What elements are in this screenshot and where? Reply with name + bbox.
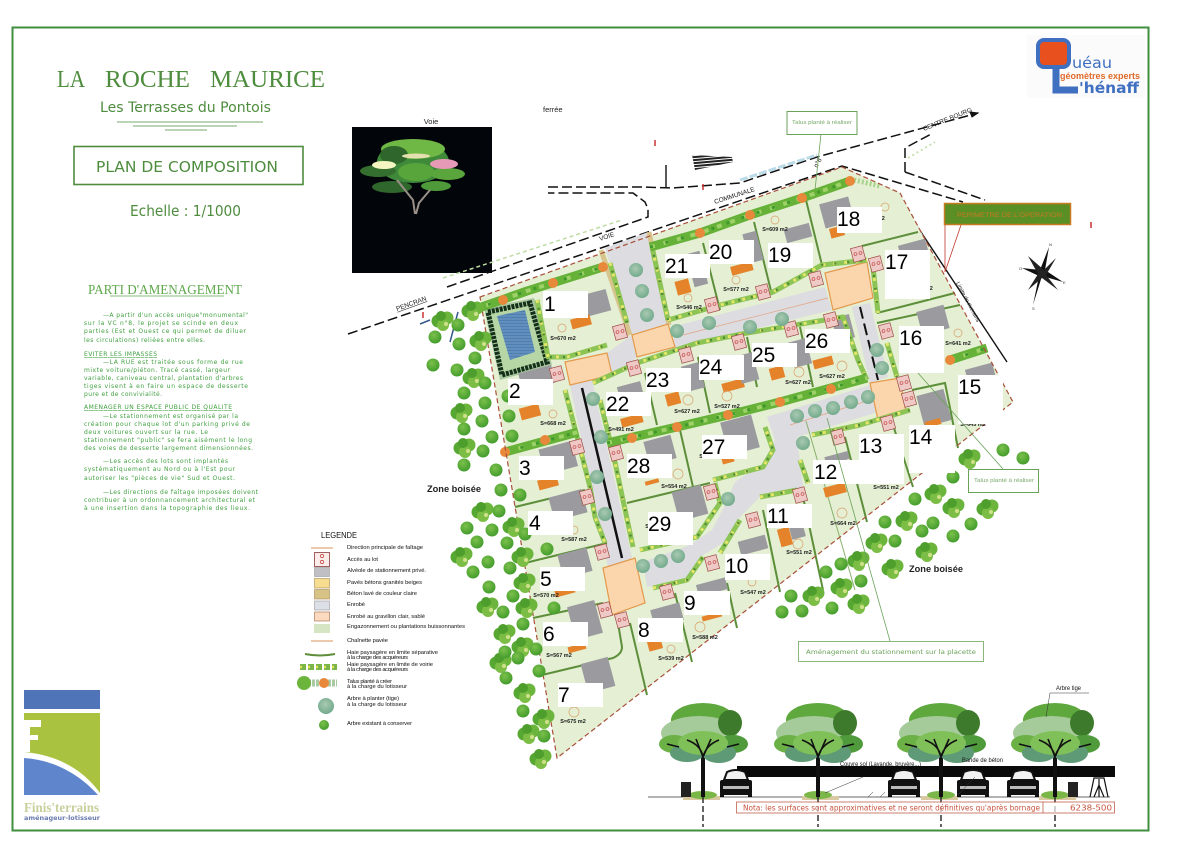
logo: Finis'terrains (24, 690, 101, 822)
lot number labels: 6 (543, 623, 555, 646)
section labels: Couvre sol (Lavande, bruyère...) (840, 762, 921, 768)
woodland trees (426, 301, 1030, 769)
logo: Finis'terrains: Finis'terrains (24, 801, 100, 816)
lot surface labels: S=567 m2 (546, 653, 572, 659)
lot surface labels: S=590 m2 (645, 524, 671, 530)
lot number labels: 28 (627, 455, 650, 478)
lot number labels: 16 (899, 327, 922, 350)
section labels: Bande de béton (962, 758, 1003, 764)
lot surface labels: S=668 m2 (540, 421, 566, 427)
parti d'amenagement text block: —Les directions de faîtage imposées doivent (103, 489, 259, 496)
scale: Echelle : 1/1000 (130, 202, 241, 220)
planted talus hedges (473, 176, 987, 457)
lot surface labels: S=627 m2 (674, 409, 700, 415)
road labels: CENTRE BOURG (922, 107, 973, 133)
parti d'amenagement text block: —Les accès des lots sont implantés (103, 458, 228, 465)
road labels: PENCRAN (395, 295, 428, 313)
zone labels: Zone boisée (909, 564, 963, 575)
legend: Arbre à planter (tige) (347, 696, 399, 702)
lot number labels: 26 (805, 330, 828, 353)
note box: 6238-500 (1070, 804, 1112, 812)
lot number labels: 24 (699, 356, 723, 379)
tree image on black panel (352, 117, 492, 273)
logo: Quéau Chénaff: uéau (1072, 54, 1112, 72)
roads (570, 232, 888, 587)
callout: stationnement: Aménagement du stationnement sur la placette (806, 648, 976, 656)
perimeter label: PERIMETRE DE L'OPERATION (957, 212, 1062, 219)
lot number labels (508, 207, 1003, 707)
lot surface labels: S=539 m2 (658, 656, 684, 662)
parti d'amenagement text block: tiges visent à en faire un espace de desserte (84, 383, 248, 390)
callout: stationnement (798, 418, 984, 662)
legend: à la charge du lotisseur (347, 684, 407, 690)
legend: LEGENDE (321, 531, 357, 540)
lot surface labels: S=577 m2 (723, 287, 749, 293)
legend: Haie paysagère en limite de voirie (347, 662, 433, 668)
lot number labels: 19 (768, 244, 791, 267)
lot surface labels: S=670 m2 (550, 336, 576, 342)
legend: Alvéole de stationnement privé. (347, 568, 426, 574)
planted street trees (586, 263, 889, 573)
lot surface labels: S=600 m2 (699, 454, 725, 460)
lot number labels: 21 (665, 255, 688, 278)
road labels: Talus boisé (683, 217, 709, 231)
road labels: ferrée (543, 105, 563, 114)
lot number labels: 14 (909, 426, 933, 449)
pool (484, 298, 552, 380)
lot number labels: 27 (702, 436, 725, 459)
lot surface labels: S=551 m2 (786, 550, 812, 556)
callout: talus top: Talus planté à réaliser (792, 120, 852, 126)
lot dividers (515, 200, 960, 695)
houses (518, 197, 996, 693)
parti d'amenagement text block: pure et de convivialité. (84, 391, 162, 398)
lot surface labels: S=627 m2 (819, 374, 845, 380)
callout: talus right: Talus planté à réaliser (974, 478, 1034, 484)
lot number labels: 1 (544, 293, 556, 316)
title: MAURICE (210, 67, 325, 93)
title: LA (57, 67, 86, 93)
legend: Enrobé au gravillon clair, sablé (347, 614, 425, 620)
lot surface labels: S=664 m2 (830, 521, 856, 527)
bins (681, 782, 1078, 797)
legend: Arbre existant à conserver (347, 721, 412, 727)
note box: Nota: les surfaces sont approximatives et ne seront définitives qu'après bornage (743, 804, 1040, 812)
parti d'amenagement text block: contribuer à un ordonnancement architectural et (84, 497, 256, 504)
parti d'amenagement text block: AMENAGER UN ESPACE PUBLIC DE QUALITE (84, 404, 232, 411)
lot number labels: 20 (709, 241, 732, 264)
lot surface labels: S=641 m2 (945, 341, 971, 347)
section ground cover (689, 791, 1069, 799)
parti d'amenagement text block: mixte voiture/piéton. Tracé cassé, largeur (84, 367, 231, 374)
lot surface labels: S=546 m2 (676, 305, 702, 311)
parti d'amenagement text block: systématiquement au Nord ou à l'Est pour (84, 466, 236, 473)
road labels: Limite de riverains (954, 281, 981, 324)
lot number labels: 22 (606, 393, 629, 416)
lot surface labels: S=635 m2 (859, 216, 885, 222)
access boxes (549, 246, 917, 628)
lot number labels: 10 (725, 555, 748, 578)
lot number labels: 17 (885, 251, 908, 274)
subtitle: Les Terrasses du Pontois (100, 100, 271, 116)
lot number labels: 15 (958, 376, 981, 399)
section planters (683, 796, 1076, 800)
lot number labels: 3 (519, 457, 531, 480)
parti d'amenagement text block: autoriser les "pièces de vie" Sud et Ouest. (84, 475, 235, 482)
road labels: accès futur (891, 307, 919, 319)
parti d'amenagement text block: sur la VC n°8, le projet se scinde en deux (84, 320, 238, 327)
parti d'amenagement text block: —LA RUE est traitée sous forme de rue (103, 359, 243, 366)
road labels: COMMUNALE (713, 186, 756, 206)
lot number labels: 5 (540, 568, 552, 591)
lawn parcel (480, 167, 1013, 758)
legend: Direction principale de faîtage (347, 545, 423, 551)
compass rose: E (1063, 280, 1066, 285)
legend (297, 531, 465, 730)
section cars (720, 770, 1039, 797)
legend: Chaînette pavée (347, 638, 388, 644)
site plan (473, 167, 1013, 758)
zone labels (427, 484, 963, 575)
parti d'amenagement text block: à une insertion dans la topographie des lieux. (84, 505, 250, 512)
legend: Enrobé (347, 602, 365, 608)
parti d'amenagement text block: des voies de desserte largement dimensionnées. (84, 445, 253, 452)
placettes (565, 262, 906, 615)
section labels: Arbre tige (1056, 686, 1082, 692)
zone labels: Zone boisée (427, 484, 481, 495)
parti d'amenagement text block: EVITER LES IMPASSES (84, 351, 157, 358)
legend: Béton lavé de couleur claire (347, 591, 417, 597)
parti d'amenagement text block: —A partir d'un accès unique"monumental" (103, 312, 248, 319)
logo: Quéau Chénaff: géomètres experts (1060, 71, 1140, 82)
lot number labels: 7 (558, 684, 570, 707)
road labels: VOIE (598, 231, 616, 243)
lot surface labels: S=588 m2 (692, 635, 718, 641)
lot surface labels: S=527 m2 (714, 404, 740, 410)
parti d'amenagement text block: deux voitures ouvert sur la rue. Le (84, 429, 208, 436)
lot surface labels: S=547 m2 (740, 590, 766, 596)
road labels: n°8 (812, 156, 824, 169)
note box (736, 802, 1114, 813)
parti d'amenagement text block (84, 283, 259, 512)
title (57, 67, 325, 93)
parti d'amenagement text block: les circulations) reliées entre elles. (84, 337, 205, 344)
lot surface labels: S=587 m2 (561, 537, 587, 543)
lot number labels: 2 (509, 380, 521, 403)
parti d'amenagement text block: —Le stationnement est organisé par la (103, 413, 238, 420)
lot number labels: 13 (859, 435, 882, 458)
plan heading box: PLAN DE COMPOSITION (96, 158, 278, 176)
tree image on black panel: Voie (424, 117, 438, 126)
low hedges (537, 247, 910, 588)
perimeter label (944, 204, 1070, 272)
parti d'amenagement text block: variable, caniveau central, plantation d'arbres (84, 375, 243, 382)
legend: Haie paysagère en limite séparative (347, 650, 438, 656)
logo: Quéau Chénaff: 'hénaff (1079, 79, 1140, 97)
title block (57, 67, 325, 220)
site boundary (480, 167, 1013, 758)
compass rose: S (1032, 306, 1035, 311)
parti d'amenagement text block: parties (Est et Ouest ce qui permet de diluer (84, 328, 247, 335)
lot surface labels: S=675 m2 (560, 719, 586, 725)
logo: Finis'terrains: aménageur-lotisseur (24, 814, 101, 822)
legend: à la charge du lotisseur (347, 702, 407, 708)
lot number labels: 25 (752, 344, 775, 367)
callout: talus right (918, 373, 1038, 492)
lot number labels: 29 (648, 513, 671, 536)
title: ROCHE (105, 67, 190, 93)
legend: à la charge des acquéreurs (347, 655, 408, 661)
legend: Accès au lot (347, 557, 378, 563)
section trees (659, 703, 1100, 827)
lot number labels: 18 (837, 208, 860, 231)
section labels (840, 686, 1082, 768)
lot surface labels: S=554 m2 (661, 484, 687, 490)
lot surface labels: S=551 m2 (873, 485, 899, 491)
logo: Quéau Chénaff (1027, 35, 1145, 98)
lot surface labels: S=609 m2 (762, 227, 788, 233)
parti d'amenagement text block: stationnement "public" se fera aisément le long (84, 437, 252, 444)
parti d'amenagement text block: PARTI D'AMENAGEMENT (88, 283, 242, 298)
road and surveying lines (348, 105, 1091, 362)
compass rose: O (1019, 266, 1022, 271)
lot surface labels: S=645 m2 (960, 422, 986, 428)
parti d'amenagement text block: création pour chaque lot d'un parking privé de (84, 421, 250, 428)
plan heading box (74, 146, 303, 184)
callout: talus top (787, 112, 857, 190)
lot number labels: 11 (767, 505, 789, 528)
lot surface labels: S=627 m2 (785, 380, 811, 386)
lot number labels: 8 (638, 619, 650, 642)
road labels (395, 105, 981, 324)
black bar (737, 766, 1115, 777)
lot number labels: 4 (529, 512, 541, 535)
lot number labels: 23 (646, 369, 669, 392)
compass rose (1019, 242, 1066, 311)
lot number labels: 12 (814, 461, 837, 484)
lot surface labels: S=620 m2 (907, 286, 933, 292)
pedestrians (1090, 778, 1108, 797)
compass rose: N (1049, 242, 1052, 247)
legend: Talus planté à créer (347, 679, 392, 685)
lot surface labels: S=491 m2 (608, 427, 634, 433)
legend: à la charge des acquéreurs (347, 667, 408, 673)
legend: Pavés bétons granités beiges (347, 580, 422, 586)
street cross-section (648, 686, 1115, 827)
legend: Engazonnement ou plantations buissonnantes (347, 624, 465, 630)
lot surface labels: S=570 m2 (533, 593, 559, 599)
lot number labels: 9 (684, 592, 696, 615)
lot surface labels (533, 203, 986, 725)
